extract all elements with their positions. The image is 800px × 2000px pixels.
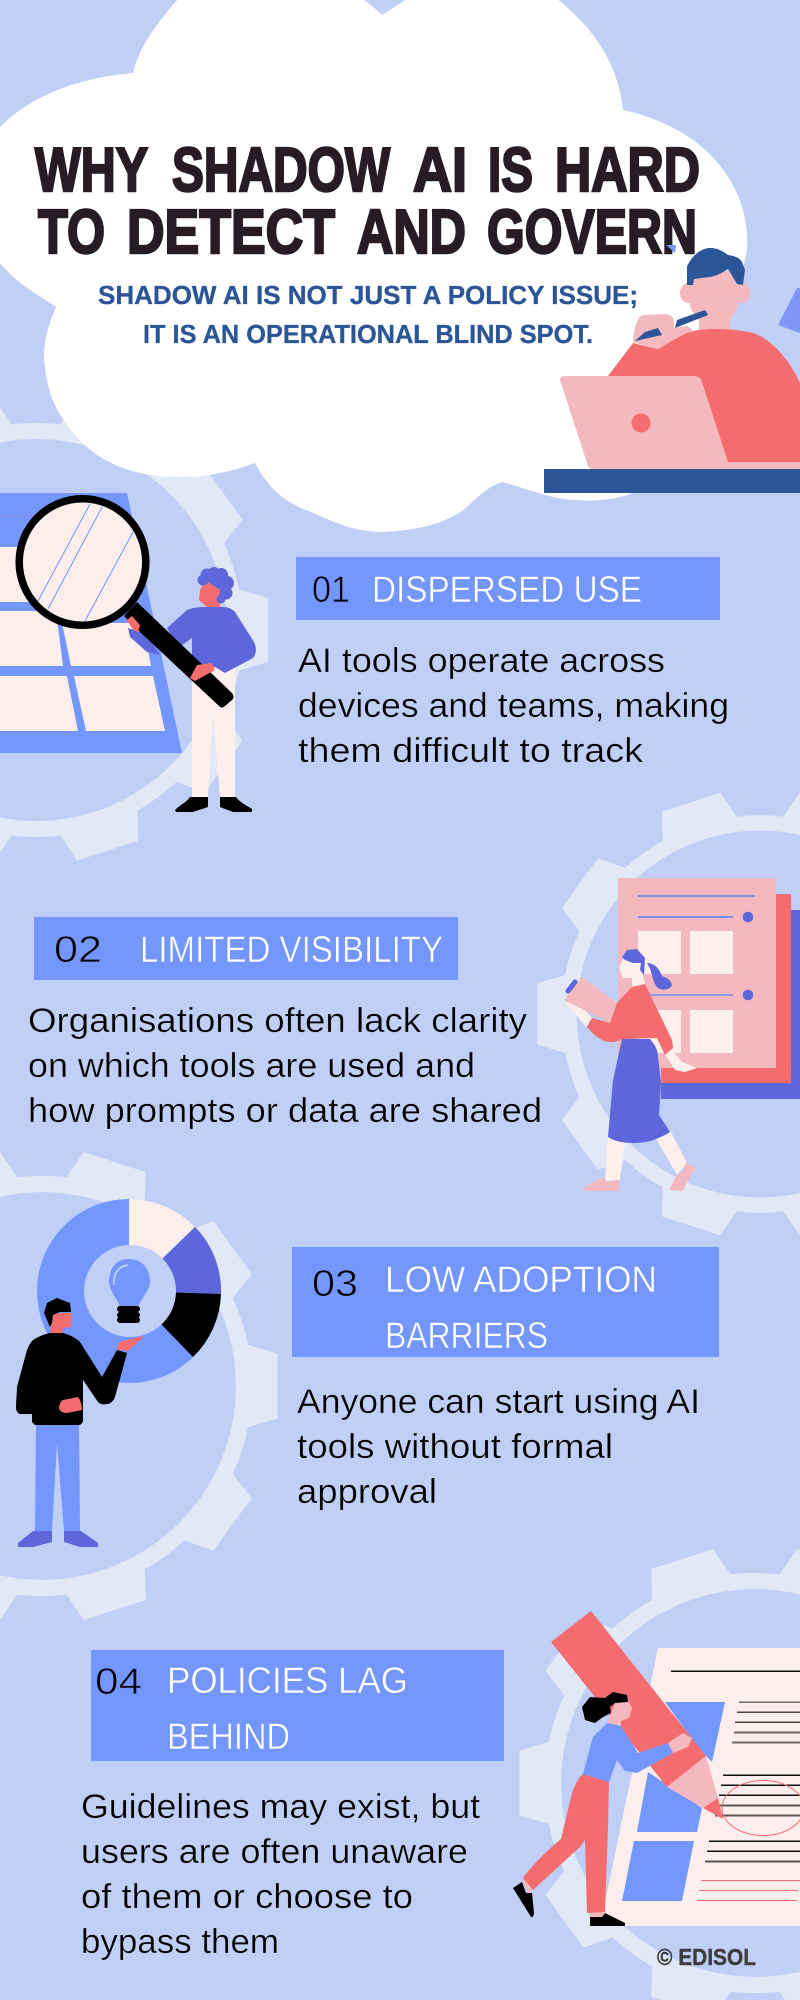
body text 02: Organisations often lack clarity <box>28 1002 527 1040</box>
body text 04: users are often unaware <box>81 1833 468 1871</box>
panel: 02 limited visibility <box>28 917 542 1130</box>
title: HARD <box>555 136 700 205</box>
banner 03 <box>292 1247 719 1357</box>
title: SHADOW <box>172 136 390 205</box>
body text 04 <box>81 1788 481 1961</box>
title: IS <box>488 136 533 205</box>
banner 04 <box>91 1650 504 1761</box>
illustration: woman carrying giant pencil <box>513 1611 723 1926</box>
background gear 2 <box>537 790 800 1238</box>
illustration: document stack <box>618 878 800 1099</box>
illustration: woman with clipboard <box>564 949 697 1191</box>
body text 04: bypass them <box>81 1923 279 1961</box>
illustration: man with magnifying glass <box>128 567 256 812</box>
title: DETECT <box>127 198 335 267</box>
background gear 4 <box>520 1546 800 2000</box>
body text 03: Anyone can start using AI <box>297 1383 700 1421</box>
chart: donut with light bulb <box>37 1199 221 1383</box>
title: TO <box>38 198 105 267</box>
copyright credit: © EDISOL <box>657 1944 756 1970</box>
panel: 01 dispersed use <box>296 557 729 770</box>
body text 01: devices and teams, making <box>298 687 729 725</box>
banner 04: 04 <box>95 1661 142 1702</box>
body text 01: AI tools operate across <box>298 642 665 680</box>
body text 02 <box>28 1002 542 1130</box>
background gear 1 <box>0 396 268 864</box>
title: WHY <box>35 136 148 205</box>
banner 02 <box>34 917 458 980</box>
illustration: man at laptop with pen <box>544 245 800 493</box>
banner 03: BARRIERS <box>385 1315 548 1356</box>
banner 01: 01 <box>312 569 350 610</box>
title: AND <box>357 198 466 267</box>
banner 01 <box>296 557 720 620</box>
banner 03: 03 <box>312 1263 358 1304</box>
body text 03: tools without formal <box>297 1428 613 1466</box>
body text 03 <box>297 1383 700 1511</box>
body text 01: them difficult to track <box>298 732 644 770</box>
banner 04: BEHIND <box>167 1716 290 1757</box>
body text 04: of them or choose to <box>81 1878 413 1916</box>
banner 03: LOW ADOPTION <box>385 1259 657 1300</box>
body text 02: how prompts or data are shared <box>28 1092 542 1130</box>
body text 03: approval <box>297 1473 437 1511</box>
panel: 03 low adoption barriers <box>292 1247 719 1511</box>
banner 02: 02 <box>54 929 102 970</box>
body text 01 <box>298 642 729 770</box>
body text 04: Guidelines may exist, but <box>81 1788 481 1826</box>
title: GOVERN <box>487 198 697 267</box>
panel: 04 policies lag behind <box>81 1650 504 1961</box>
subtitle: IT IS AN OPERATIONAL BLIND SPOT. <box>143 319 593 349</box>
illustration: blue window panel <box>0 493 182 753</box>
illustration: large document <box>600 1648 800 1926</box>
icon: magnifying glass <box>19 499 234 708</box>
banner 02: LIMITED VISIBILITY <box>140 929 443 970</box>
body text 02: on which tools are used and <box>28 1047 475 1085</box>
subtitle <box>98 280 638 349</box>
illustration: man holding bulb <box>16 1298 143 1547</box>
title: AI <box>413 136 467 205</box>
icon: light bulb <box>109 1259 150 1323</box>
title <box>35 136 700 267</box>
banner 01: DISPERSED USE <box>372 569 642 610</box>
subtitle: SHADOW AI IS NOT JUST A POLICY ISSUE; <box>98 280 638 310</box>
banner 04: POLICIES LAG <box>167 1660 408 1701</box>
white cloud behind the title <box>0 0 747 532</box>
background gear 3 <box>0 1149 277 1623</box>
